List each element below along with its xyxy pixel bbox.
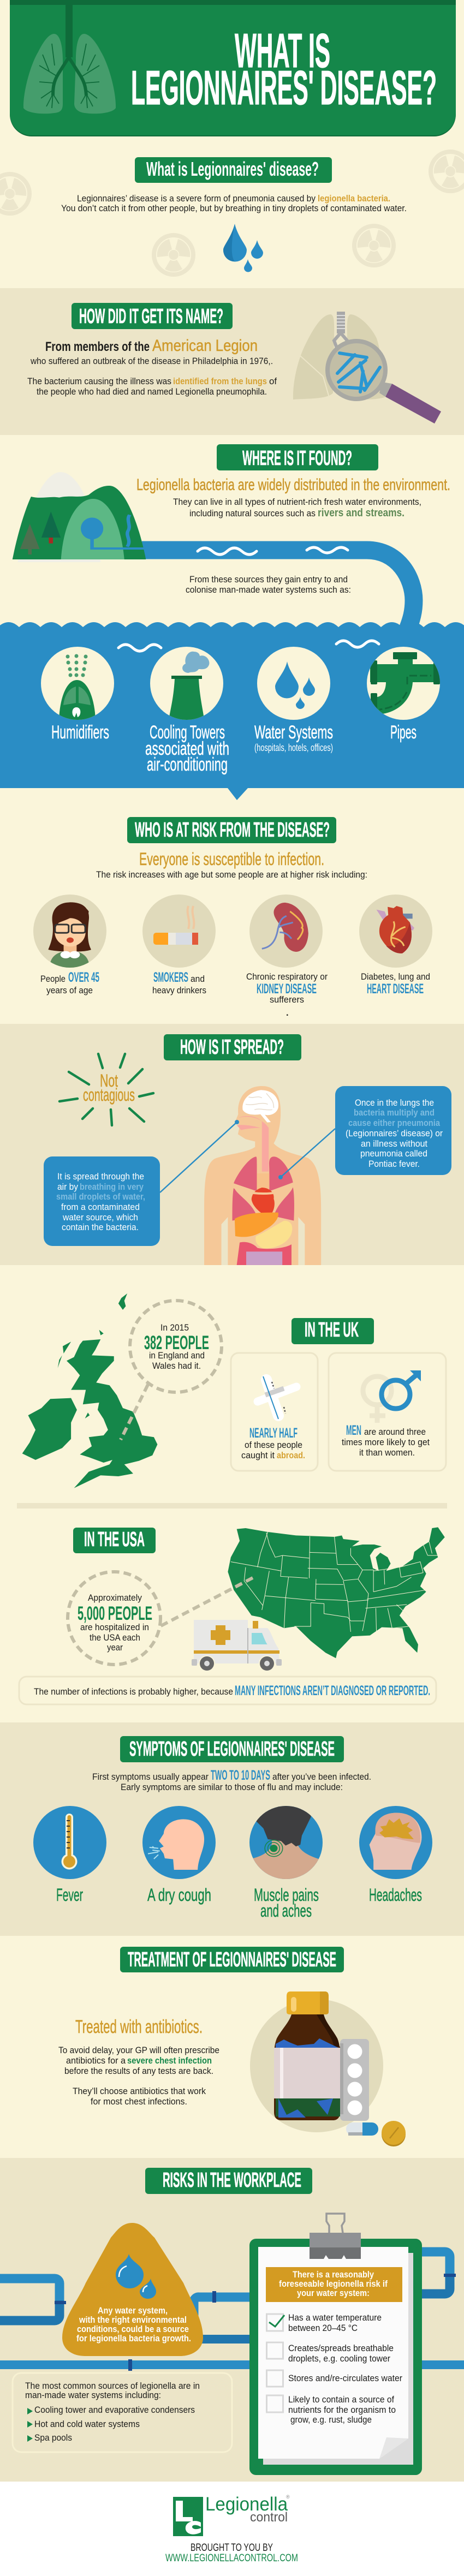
logo <box>173 2494 290 2536</box>
checklist items: between 20–45 °C <box>288 2323 358 2333</box>
callout: once in the lungs: an illness without <box>361 1139 427 1149</box>
symptom: headaches <box>359 1806 432 1905</box>
text: symptoms intro: First symptoms usually appear <box>92 1772 209 1782</box>
callout: spread through air: small droplets of water, <box>56 1192 145 1202</box>
text: american legion: identified from the lungs <box>173 377 267 386</box>
callout: 382 people: In 2015 <box>160 1323 189 1333</box>
heading: name: HOW DID IT GET ITS NAME? <box>79 305 223 328</box>
background radiation symbols <box>0 152 464 275</box>
checklist title: There is a reasonably <box>293 2269 374 2280</box>
item: cooling towers <box>145 647 229 775</box>
item: pipes <box>367 647 440 743</box>
symptom: muscle pains: and aches <box>260 1901 312 1921</box>
icon: lungs under magnifier <box>293 312 441 424</box>
symptom: fever <box>33 1806 106 1905</box>
icon: ambulance <box>192 1620 282 1672</box>
item: cooling towers: Cooling Towers <box>150 722 225 743</box>
title: WHAT IS <box>235 23 330 77</box>
text: treated with antibiotics: To avoid delay, your GP will often prescribe <box>58 2046 219 2055</box>
text: treated with antibiotics: They’ll choose antibiotics that work <box>73 2086 206 2096</box>
callout: 382 people: 382 PEOPLE <box>144 1332 209 1353</box>
item: smokers: heavy drinkers <box>152 986 206 995</box>
text: american legion: American Legion <box>152 337 258 355</box>
logo: ® <box>286 2494 290 2500</box>
card: nearly half: of these people <box>245 1440 302 1450</box>
text: american legion: The bacterium causing the illness was <box>27 377 171 386</box>
symptom: dry cough: A dry cough <box>147 1885 211 1905</box>
heading: spread: HOW IS IT SPREAD? <box>180 1036 284 1059</box>
item: kidney disease: Chronic respiratory or <box>246 972 328 982</box>
item: kidney disease: . <box>286 1008 289 1018</box>
text: american legion <box>27 337 277 397</box>
checklist items: Has a water temperature <box>288 2313 382 2323</box>
connector lines <box>160 1120 335 1192</box>
footer credit: BROUGHT TO YOU BY <box>191 2542 273 2554</box>
callout: once in the lungs: bacteria multiply and <box>354 1108 435 1118</box>
text: treated with antibiotics: severe chest infection <box>127 2056 212 2066</box>
callout: once in the lungs: pneumonia called <box>360 1149 427 1159</box>
item: water systems <box>254 647 333 753</box>
callout: spread through air: air by <box>57 1182 79 1192</box>
item: heart disease: Diabetes, lung and <box>361 972 430 982</box>
footer credit: WWW.LEGIONELLACONTROL.COM <box>165 2553 298 2564</box>
text: symptoms intro <box>92 1768 371 1792</box>
text: symptoms intro: Early symptoms are similar to those of flu and may include: <box>121 1782 343 1792</box>
callout: spread through air: contain the bacteria. <box>62 1223 139 1232</box>
heading: workplace <box>145 2168 312 2194</box>
checklist items <box>266 2313 402 2425</box>
callout: any water system: for legionella bacteria growth. <box>76 2333 191 2344</box>
text: treated with antibiotics: Treated with antibiotics. <box>75 2017 203 2037</box>
text: definition: You don’t catch it from other people, but by breathing in tiny droplets of contaminated water. <box>61 204 407 213</box>
callout: spread through air: breathing in very <box>80 1182 144 1192</box>
note: infections underreported: The number of infections is probably higher, because <box>34 1687 233 1697</box>
header banner <box>10 0 456 136</box>
text: definition <box>61 194 407 213</box>
item: cooling towers: air-conditioning <box>147 754 228 775</box>
callout: once in the lungs <box>335 1086 451 1175</box>
callout: any water system: with the right environmental <box>79 2315 187 2325</box>
panel: risks in the workplace <box>0 2168 464 2475</box>
heading: in the USA <box>73 1528 156 1553</box>
card: nearly half: abroad. <box>277 1451 305 1460</box>
text: treated with antibiotics <box>58 2017 219 2107</box>
icon: gender symbols <box>363 1370 421 1423</box>
card: nearly half: caught it <box>241 1451 275 1460</box>
item: kidney disease <box>246 895 328 1018</box>
map: United States <box>228 1527 445 1658</box>
heading: what is legionnaires <box>135 157 332 183</box>
card: men more likely <box>329 1353 446 1471</box>
text: treated with antibiotics: antibiotics for a <box>66 2056 126 2066</box>
card: common sources: Hot and cold water systems <box>34 2419 140 2429</box>
heading: treatment <box>120 1947 344 1972</box>
item: kidney disease: KIDNEY DISEASE <box>257 981 317 997</box>
text: american legion: of <box>269 377 277 386</box>
icon: lungs <box>23 5 116 114</box>
symptom: muscle pains: Muscle pains <box>254 1885 319 1905</box>
text: distribution <box>136 476 450 595</box>
item: cooling towers: associated with <box>145 738 229 759</box>
icon: water drops <box>223 224 263 272</box>
callout: spread through air: from a contaminated <box>61 1202 140 1212</box>
callout: 5,000 people <box>68 1572 253 1665</box>
checklist items: Stores and/re-circulates water <box>288 2374 402 2383</box>
callout: spread through air: It is spread through the <box>57 1172 144 1182</box>
text: american legion: the people who had died and named Legionella pneumophila. <box>37 387 267 397</box>
callout: once in the lungs: Pontiac fever. <box>368 1159 420 1169</box>
heading: risk <box>127 817 336 843</box>
text: american legion: From members of the <box>45 339 150 354</box>
card: common sources: The most common sources of legionella are in <box>25 2381 200 2391</box>
text: distribution: rivers and streams. <box>318 507 404 519</box>
callout: any water system: Any water system, <box>98 2305 168 2316</box>
sea and river <box>0 547 464 800</box>
panel: in the UK <box>22 1293 446 1488</box>
text: everyone susceptible: Everyone is susceptible to infection. <box>139 849 324 869</box>
checklist items: nutrients for the organism to <box>288 2405 396 2415</box>
panel: how is it spread <box>44 1034 451 1265</box>
heading: spread <box>164 1034 301 1060</box>
panel: how did it get its name <box>27 303 441 424</box>
item: kidney disease: sufferers <box>270 995 304 1005</box>
panel: who is at risk <box>33 817 432 1018</box>
text: everyone susceptible <box>96 849 367 880</box>
callout: spread through air <box>44 1156 160 1246</box>
callout: spread through air: water source, which <box>62 1213 138 1223</box>
card: nearly half <box>231 1353 318 1471</box>
footer credit <box>165 2542 298 2564</box>
logo: control <box>250 2510 288 2525</box>
card: men more likely: times more likely to get <box>342 1438 430 1447</box>
logo: Legionella <box>205 2494 288 2515</box>
checklist title: foreseeable legionella risk if <box>279 2279 388 2289</box>
text: treated with antibiotics: before the results of any tests are back. <box>64 2066 213 2076</box>
note: infections underreported <box>19 1677 436 1704</box>
callout: any water system: conditions, could be a source <box>77 2324 189 2334</box>
item: pipes: Pipes <box>390 722 417 743</box>
callout: 5,000 people: 5,000 PEOPLE <box>78 1603 152 1624</box>
callout: 382 people: in England and <box>149 1351 205 1361</box>
heading: in the UK: IN THE UK <box>305 1319 359 1341</box>
item: humidifiers: Humidifiers <box>51 722 109 743</box>
heading: where <box>217 444 378 470</box>
text: distribution: From these sources they gain entry to and <box>189 575 348 585</box>
symptom: muscle pains <box>249 1803 323 1921</box>
title <box>131 23 437 115</box>
icon: mountains and lake <box>18 472 100 562</box>
checklist items: droplets, e.g. cooling tower <box>288 2354 390 2364</box>
card: nearly half: NEARLY HALF <box>249 1426 298 1441</box>
callout: not contagious: Not <box>100 1071 118 1090</box>
item: people over 45: years of age <box>46 986 93 995</box>
callout: 382 people: Wales had it. <box>152 1361 201 1371</box>
clip <box>310 2214 361 2259</box>
callout: 5,000 people: the USA each <box>90 1633 140 1643</box>
checklist items: grow, e.g. rust, sludge <box>290 2415 372 2425</box>
item: smokers: SMOKERS <box>153 970 188 985</box>
heading: symptoms <box>120 1736 344 1762</box>
callout: 5,000 people: Approximately <box>88 1593 142 1603</box>
checklist items: Likely to contain a source of <box>288 2395 394 2405</box>
water pipes <box>0 2252 464 2371</box>
heading: name <box>72 303 233 329</box>
item: water systems: (hospitals, hotels, offices) <box>254 742 333 753</box>
checklist items: Creates/spreads breathable <box>288 2344 394 2353</box>
item: smokers <box>142 895 216 995</box>
text: everyone susceptible: The risk increases with age but some people are at higher risk including: <box>96 870 367 880</box>
text: american legion: who suffered an outbreak of the disease in Philadelphia in 1976,. <box>30 356 273 366</box>
symptom: fever: Fever <box>56 1885 83 1905</box>
heading: in the UK <box>292 1318 374 1344</box>
symptom: dry cough <box>142 1806 216 1905</box>
symptom: headaches: Headaches <box>369 1885 422 1905</box>
callout: once in the lungs: cause either pneumonia <box>348 1118 441 1128</box>
panel: where is it found <box>0 444 464 800</box>
footer <box>165 2494 298 2564</box>
callout: 382 people <box>121 1301 222 1440</box>
text: symptoms intro: TWO TO 10 DAYS <box>211 1768 270 1783</box>
item: humidifiers <box>41 647 114 743</box>
card: men more likely: are around three <box>364 1427 426 1437</box>
callout: any water system <box>62 2223 203 2356</box>
icon: green hills <box>13 486 146 559</box>
icon: medicine bottle and pills <box>250 1991 406 2146</box>
callout: not contagious: contagious <box>83 1085 135 1105</box>
card: common sources: Spa pools <box>34 2433 72 2443</box>
callout: once in the lungs: Once in the lungs the <box>355 1098 434 1108</box>
callout: 5,000 people: year <box>107 1643 123 1653</box>
panel: in the USA <box>19 1527 445 1704</box>
item: water systems: Water Systems <box>254 722 333 743</box>
text: definition: legionella bacteria. <box>318 194 390 204</box>
text: symptoms intro: after you’ve been infected. <box>272 1772 371 1782</box>
text: treated with antibiotics: for most chest infections. <box>91 2097 187 2107</box>
callout: not contagious <box>60 1054 153 1125</box>
clipboard checklist <box>249 2214 422 2475</box>
text: distribution: colonise man-made water systems such as: <box>186 585 351 595</box>
card: common sources <box>13 2373 232 2452</box>
text: definition: Legionnaires’ disease is a severe form of pneumonia caused by <box>77 194 316 204</box>
checklist title: your water system: <box>297 2288 370 2298</box>
heading: workplace: RISKS IN THE WORKPLACE <box>163 2169 301 2192</box>
heading: in the USA: IN THE USA <box>84 1528 145 1551</box>
card: common sources: man-made water systems including: <box>25 2390 161 2400</box>
icon: aeroplane <box>258 1376 296 1419</box>
item: people over 45: OVER 45 <box>68 970 99 985</box>
card: men more likely: MEN <box>346 1423 361 1438</box>
icon: human body <box>204 1086 321 1265</box>
card: common sources: Cooling tower and evaporative condensers <box>34 2405 195 2415</box>
card: men more likely: it than women. <box>359 1448 415 1458</box>
callout: 5,000 people: are hospitalized in <box>80 1623 149 1632</box>
callout: once in the lungs: (Legionnaires’ disease) or <box>346 1129 443 1138</box>
item: people over 45 <box>33 895 106 995</box>
heading: what is legionnaires: What is Legionnaires' disease? <box>146 158 319 180</box>
checklist title <box>266 2267 402 2302</box>
text: distribution: including natural sources such as <box>189 509 316 518</box>
item: smokers: and <box>191 974 205 984</box>
panel: treatment <box>58 1947 406 2146</box>
item: people over 45: People <box>40 974 66 984</box>
item: heart disease <box>359 895 432 997</box>
panel: symptoms <box>33 1736 432 1921</box>
map: United Kingdom and Ireland <box>22 1293 157 1488</box>
heading: where: WHERE IS IT FOUND? <box>242 447 352 470</box>
text: distribution: They can live in all types of nutrient-rich fresh water environments, <box>173 497 421 507</box>
